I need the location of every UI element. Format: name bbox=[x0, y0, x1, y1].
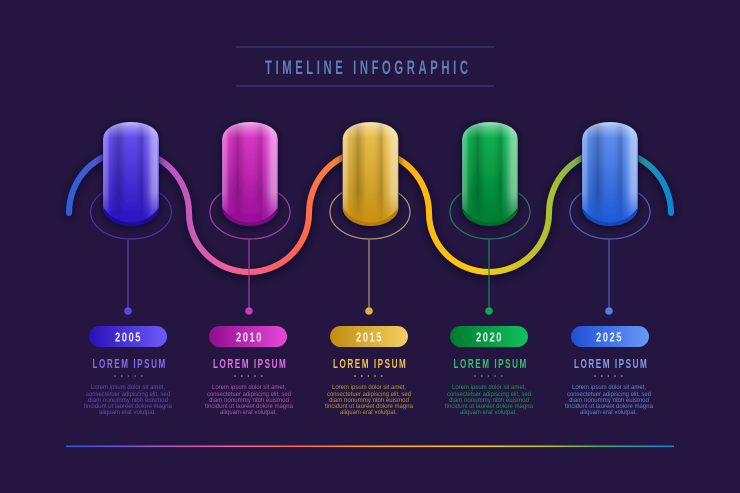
cylinder 2020 bbox=[462, 122, 518, 226]
body text: Lorem ipsum dolor sit amet, bbox=[91, 385, 165, 391]
cylinder 2015 bbox=[342, 122, 398, 226]
cylinder 2010 bbox=[222, 122, 278, 226]
body text: consectetuer adipiscing elit, sed bbox=[567, 392, 651, 398]
column 2005 bbox=[84, 240, 173, 416]
body text: diam nonummy nibh euismod bbox=[569, 398, 649, 404]
body text: consectetuer adipiscing elit, sed bbox=[327, 392, 411, 398]
year: 2015 bbox=[356, 331, 382, 345]
body text: Lorem ipsum dolor sit amet, bbox=[452, 385, 526, 391]
year: 2025 bbox=[596, 331, 622, 345]
year pill bbox=[450, 326, 528, 347]
body text: consectetuer adipiscing elit, sed bbox=[207, 392, 291, 398]
heading: LOREM IPSUM bbox=[213, 357, 286, 372]
body text: tincidunt ut laoreet dolore magna bbox=[565, 404, 654, 410]
body text: aliquam erat volutpat. bbox=[460, 410, 517, 416]
body text bbox=[205, 385, 294, 416]
body text bbox=[445, 385, 534, 416]
column 2015 bbox=[325, 240, 414, 416]
year: 2010 bbox=[236, 331, 262, 345]
body text: Lorem ipsum dolor sit amet, bbox=[212, 385, 286, 391]
dots bbox=[114, 375, 143, 377]
body text: consectetuer adipiscing elit, sed bbox=[86, 392, 170, 398]
body text bbox=[565, 385, 654, 416]
cylinder 2025 bbox=[582, 122, 638, 226]
column 2020 bbox=[445, 240, 534, 416]
body text: tincidunt ut laoreet dolore magna bbox=[84, 404, 173, 410]
title: TIMELINE INFOGRAPHIC bbox=[265, 58, 468, 79]
dots bbox=[234, 375, 263, 377]
body text: consectetuer adipiscing elit, sed bbox=[447, 392, 531, 398]
body text: aliquam erat volutpat. bbox=[340, 410, 397, 416]
body text bbox=[84, 385, 173, 416]
body text: Lorem ipsum dolor sit amet, bbox=[332, 385, 406, 391]
body text: tincidunt ut laoreet dolore magna bbox=[205, 404, 294, 410]
dots bbox=[354, 375, 383, 377]
year pill bbox=[571, 326, 649, 347]
body text bbox=[325, 385, 414, 416]
body text: tincidunt ut laoreet dolore magna bbox=[325, 404, 414, 410]
body text: diam nonummy nibh euismod bbox=[329, 398, 409, 404]
year pill bbox=[209, 326, 287, 347]
dots bbox=[474, 375, 503, 377]
heading: LOREM IPSUM bbox=[574, 357, 647, 372]
heading: LOREM IPSUM bbox=[92, 357, 165, 372]
column 2025 bbox=[565, 240, 654, 416]
body text: aliquam erat volutpat. bbox=[99, 410, 156, 416]
column 2010 bbox=[205, 240, 294, 416]
body text: tincidunt ut laoreet dolore magna bbox=[445, 404, 534, 410]
body text: diam nonummy nibh euismod bbox=[449, 398, 529, 404]
year pill bbox=[89, 326, 167, 347]
heading: LOREM IPSUM bbox=[454, 357, 526, 372]
body text: diam nonummy nibh euismod bbox=[209, 398, 289, 404]
dots bbox=[594, 375, 623, 377]
heading: LOREM IPSUM bbox=[333, 357, 406, 372]
cylinder 2005 bbox=[103, 122, 159, 226]
bottom gradient rule bbox=[66, 446, 674, 447]
wavy timeline curve bbox=[69, 151, 671, 272]
body text: aliquam erat volutpat. bbox=[580, 410, 637, 416]
body text: aliquam erat volutpat. bbox=[220, 410, 277, 416]
year: 2005 bbox=[115, 331, 140, 345]
body text: diam nonummy nibh euismod bbox=[88, 398, 168, 404]
year: 2020 bbox=[476, 331, 502, 345]
rings under cylinders bbox=[90, 185, 650, 239]
body text: Lorem ipsum dolor sit amet, bbox=[572, 385, 646, 391]
year pill bbox=[330, 326, 408, 347]
